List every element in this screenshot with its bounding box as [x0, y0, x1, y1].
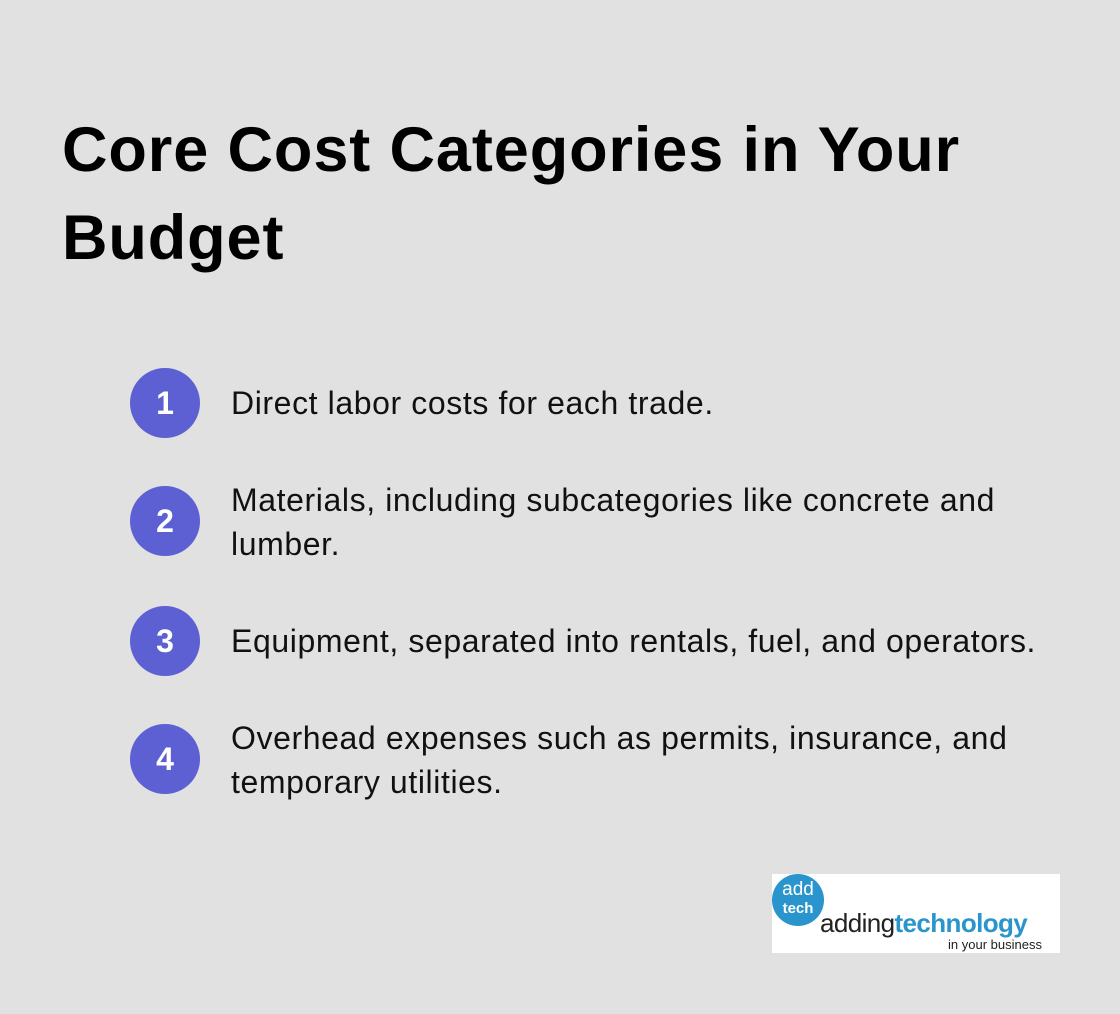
item 1: 1 [156, 385, 174, 421]
logo icon circle [772, 874, 824, 926]
item 3: Equipment, separated into rentals, fuel, and operators. [231, 623, 1036, 659]
logo text: addingtechnology [820, 908, 1027, 938]
logo: in your business [948, 937, 1042, 952]
item 3: 3 [156, 623, 174, 659]
item 3 [130, 606, 1036, 676]
item 4: temporary utilities. [231, 764, 503, 800]
item 4: 4 [156, 741, 174, 777]
title: Budget [62, 203, 284, 273]
item 2: lumber. [231, 526, 340, 562]
item 4 [130, 720, 1007, 800]
item 2: Materials, including subcategories like concrete and [231, 482, 995, 518]
item 4: Overhead expenses such as permits, insurance, and [231, 720, 1007, 756]
item 2: 2 [156, 503, 174, 539]
item 1 [130, 368, 714, 438]
title [62, 115, 960, 273]
item 1: Direct labor costs for each trade. [231, 385, 714, 421]
title: Core Cost Categories in Your [62, 115, 960, 185]
logo [772, 874, 1060, 953]
item 2 [130, 482, 995, 562]
logo icon circle: tech [783, 900, 813, 917]
logo icon circle: add [782, 879, 814, 900]
